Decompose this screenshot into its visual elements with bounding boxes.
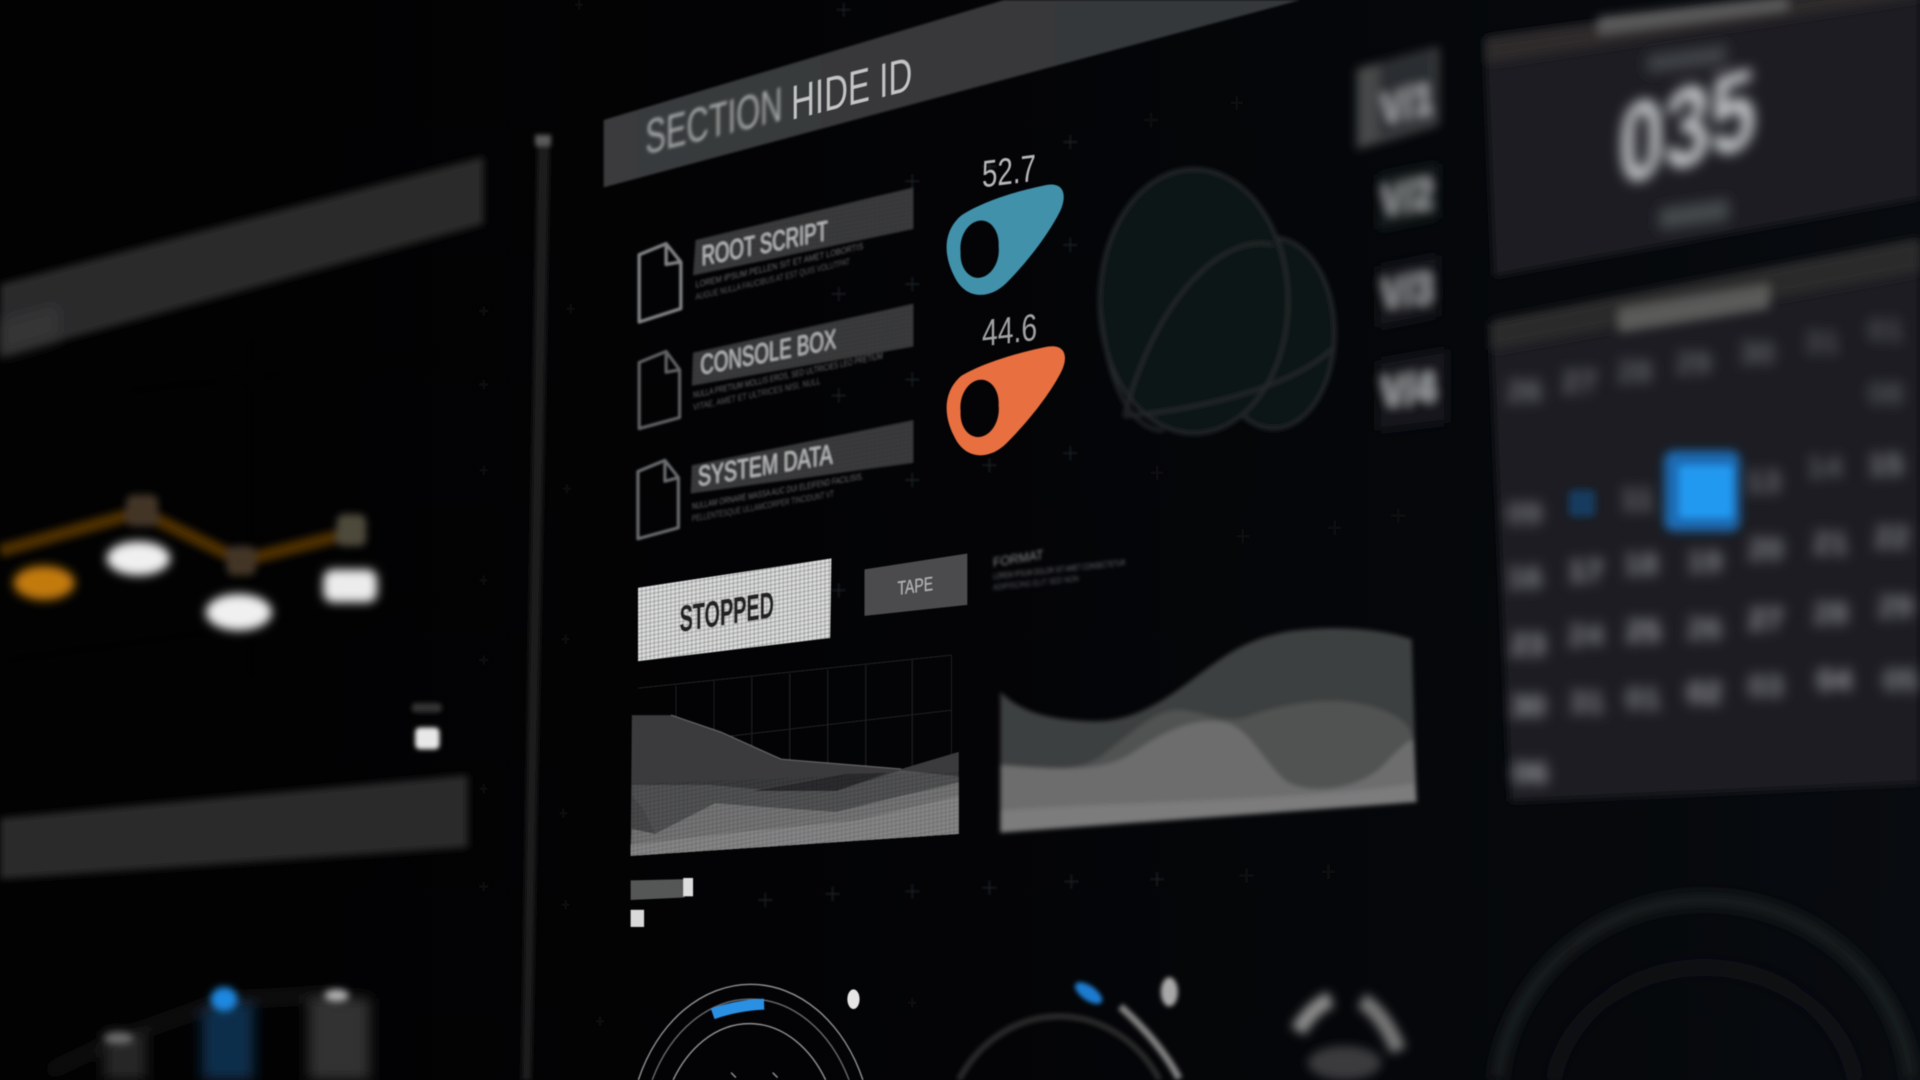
version tabs: V/2	[1381, 169, 1433, 224]
calendar dates: 02	[1687, 674, 1722, 710]
calendar dates: 05	[1883, 662, 1918, 698]
calendar dates: 25	[1626, 613, 1661, 649]
calendar dates: 08	[1868, 375, 1903, 411]
calendar dates: 31	[1804, 324, 1840, 360]
wireframe sphere chart	[1100, 169, 1335, 433]
second left band	[0, 775, 468, 879]
calendar header	[1491, 239, 1920, 350]
calendar dates: 28	[1617, 353, 1652, 389]
area chart: left	[631, 655, 959, 856]
list item: root script: ROOT SCRIPT	[702, 215, 828, 273]
calendar dates: 03	[1748, 668, 1783, 704]
version tabs: V/4	[1381, 363, 1435, 416]
calendar dates: 20	[1748, 531, 1783, 567]
gauge: orange teardrop with value: 44.6	[982, 307, 1037, 355]
counter value	[1619, 44, 1756, 230]
button: stopped: STOPPED	[680, 584, 774, 640]
list item: console box: NULLA PRETIUM MOLLIS EROS, SED ULTRICIES LEO PRETIUM	[693, 351, 883, 400]
circular gauge: blue	[638, 984, 863, 1080]
calendar dates: 18	[1623, 545, 1659, 581]
area chart: right	[1000, 628, 1417, 833]
list item: console box: VITAE, AMET ET ULTRICES NISI, NULL	[693, 376, 820, 412]
calendar dates: 06	[1513, 755, 1548, 791]
calendar dates: 26	[1687, 610, 1722, 646]
panel: section header band	[604, 0, 1300, 187]
calendar dates: 26	[1507, 373, 1542, 409]
calendar dates: 17	[1568, 553, 1603, 589]
format note: LOREM IPSUM DOLOR SIT AMET CONSECTETUR	[993, 557, 1125, 581]
icon: file	[639, 351, 680, 429]
heading: section hide id: HIDE ID	[791, 47, 912, 131]
calendar dates: 11	[1620, 480, 1654, 516]
faint plus-sign grid	[479, 0, 1406, 1026]
left header band	[0, 157, 484, 358]
list item: root script: AUGUE NULLA FAUCIBUS AT EST QUIS VOLUTPAT	[696, 256, 850, 302]
button: stopped	[638, 558, 831, 661]
bottom bars	[49, 994, 370, 1080]
calendar dates: 13	[1746, 463, 1781, 499]
calendar dates: 15	[1868, 446, 1903, 482]
calendar dates: 27	[1748, 600, 1783, 636]
calendar dates: 16	[1507, 559, 1542, 595]
calendar dates: 14	[1807, 449, 1842, 485]
list item: root script	[639, 187, 913, 322]
calendar dates: 23	[1510, 626, 1546, 662]
calendar dates: 21	[1813, 524, 1848, 560]
calendar dates: 04	[1817, 662, 1852, 698]
format note	[993, 547, 1125, 592]
vertical divider	[522, 135, 551, 1080]
list item: console box	[639, 304, 913, 429]
calendar dates: 22	[1874, 518, 1910, 554]
calendar dates: 30	[1510, 687, 1546, 723]
list item: system data: NULLAM ORNARE MASSA AUC DUI ELEIFEND FACILISIS.	[692, 471, 863, 511]
calendar dates: 27	[1562, 363, 1597, 399]
calendar dates: 01	[1868, 311, 1903, 347]
version tabs: V/3	[1381, 264, 1433, 318]
circular gauge: far right ring	[1498, 900, 1911, 1080]
version tabs: V/1	[1381, 73, 1433, 135]
button: tape	[864, 553, 967, 616]
circular gauge: right dial	[1298, 999, 1398, 1080]
panel: right calendar	[1490, 239, 1920, 802]
circular gauge: middle	[959, 977, 1179, 1080]
icon: file	[638, 460, 678, 539]
selected date	[1569, 451, 1740, 531]
calendar dates: 24	[1568, 616, 1604, 652]
gauge: blue teardrop with value	[947, 148, 1064, 295]
gauge: orange teardrop with value	[947, 307, 1065, 455]
calendar dates: 09	[1507, 495, 1542, 531]
calendar dates: 31	[1569, 684, 1605, 720]
list item: system data: SYSTEM DATA	[698, 439, 833, 493]
heading: section hide id: SECTION	[645, 78, 782, 165]
version tabs	[1357, 47, 1447, 431]
icon: file	[639, 244, 681, 322]
calendar dates: 01	[1626, 680, 1661, 716]
panel: left blurred chart panel	[0, 157, 484, 1080]
calendar dates: 19	[1687, 543, 1722, 579]
format note: FORMAT	[993, 547, 1043, 570]
calendar dates: 28	[1813, 594, 1848, 630]
bottom bar markers	[104, 987, 349, 1044]
gauge: blue teardrop with value: 52.7	[982, 148, 1036, 196]
progress bars	[631, 878, 693, 927]
list item: system data	[638, 420, 913, 539]
counter value: 035	[1619, 44, 1756, 211]
list item: root script: LOREM IPSUM PELLEN SIT ET AMET LOBORTIS	[696, 241, 863, 290]
panel: top-right counter	[1484, 0, 1920, 277]
calendar dates: 29	[1878, 588, 1913, 624]
line chart with orange trace	[0, 312, 441, 686]
format note: ADIPISCING ELIT SED NON	[993, 573, 1079, 592]
panel header strip	[1487, 0, 1920, 64]
list item: console box: CONSOLE BOX	[700, 324, 836, 382]
list item: system data: PELLENTESQUE ULLAMCORPER TINCIDUNT VT	[692, 489, 834, 524]
calendar dates	[1507, 311, 1918, 791]
button: tape: TAPE	[898, 573, 933, 600]
calendar dates: 29	[1676, 344, 1711, 380]
small white marker	[411, 703, 442, 749]
calendar dates: 30	[1739, 335, 1775, 371]
